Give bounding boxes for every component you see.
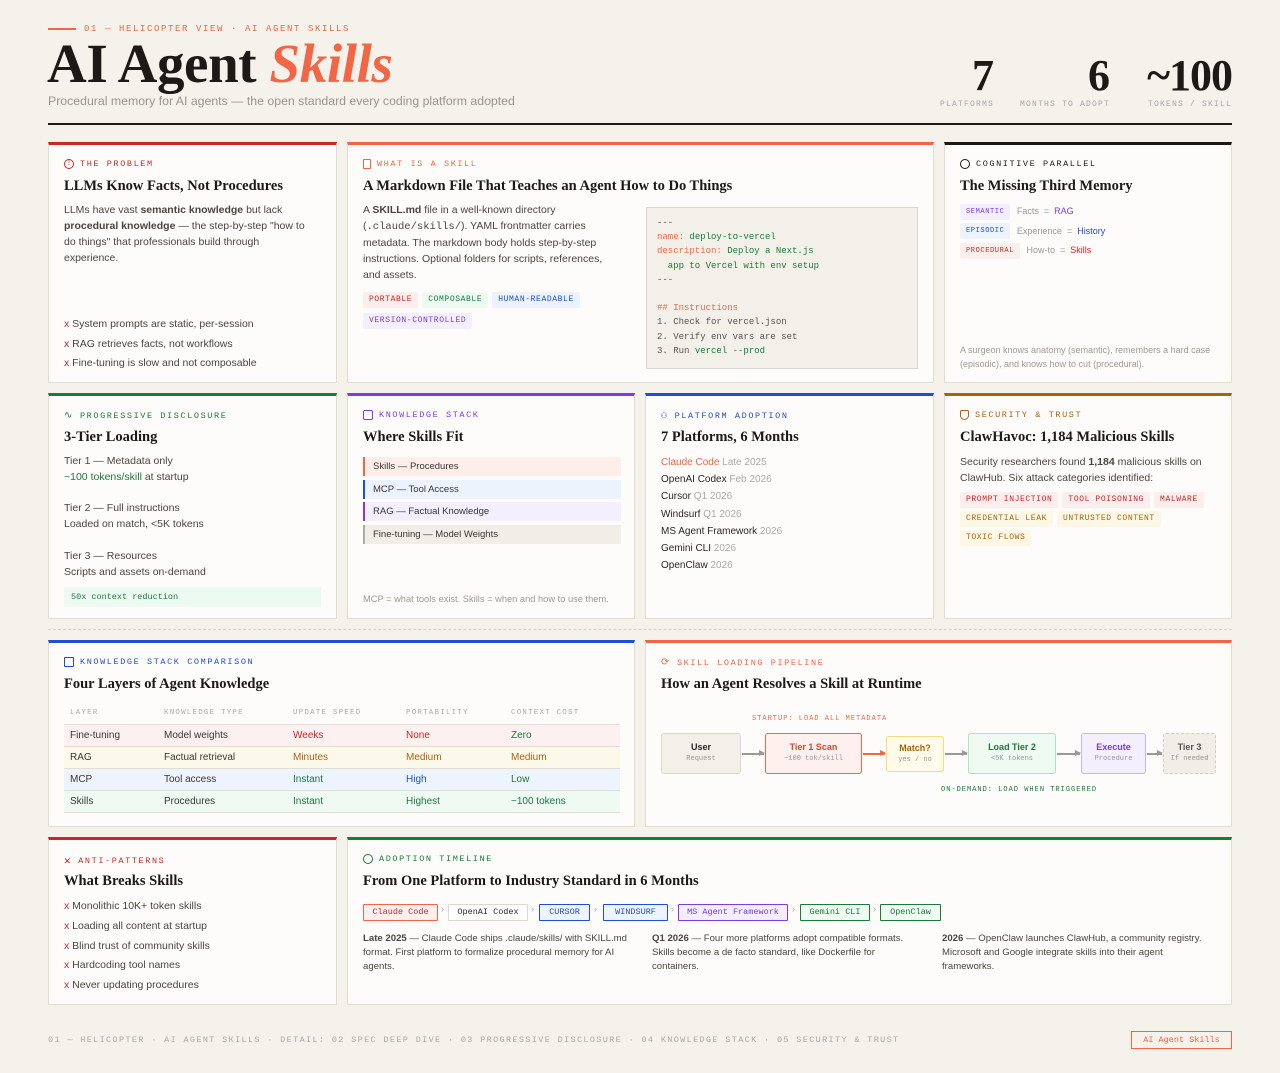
label: ⟳ [661, 658, 671, 669]
stat: months: MONTHS TO ADOPT [1020, 100, 1110, 109]
table: Zero [511, 730, 532, 740]
platform list [661, 457, 782, 571]
tiers: Tier 3 — Resources [64, 550, 157, 562]
text: Gemini CLI [809, 907, 860, 917]
header kicker: 01 — HELICOPTER VIEW · AI AGENT SKILLS [84, 24, 350, 34]
box: execute [1081, 733, 1146, 774]
table: ~100 tokens [511, 796, 566, 806]
box: tier1: Tier 1 Scan [790, 742, 837, 752]
label: ADOPTION TIMELINE [379, 854, 493, 864]
tags [960, 492, 1204, 546]
memory rows: Facts = RAG [1017, 206, 1074, 216]
label: THE PROBLEM [80, 159, 154, 169]
timeline chips [363, 904, 941, 921]
code block: --- name: deploy-to-vercel description: Deploy a Next.js app to Vercel with env setup --- ## Instructions 1. Check for vercel.json 2. Verify env vars are set 3. Run vercel --prod [657, 218, 819, 356]
memory rows: Experience = History [1017, 226, 1105, 236]
panel: security [944, 393, 1232, 619]
panel: pipeline [645, 640, 1232, 827]
stat: platforms: PLATFORMS [940, 100, 994, 109]
platform list: OpenAI Codex Feb 2026 [661, 474, 772, 485]
heading: Four Layers of Agent Knowledge [64, 676, 269, 692]
table: Model weights [164, 730, 228, 740]
text: › [441, 904, 444, 914]
table: PORTABILITY [406, 709, 469, 717]
bullets [64, 318, 257, 369]
heading: 3-Tier Loading [64, 429, 157, 445]
body: A SKILL.md file in a well-known directory (.claude/skills/). YAML frontmatter carries metadata. The markdown body holds step-by-step instructions. Optional folders for scripts, references, and assets. [363, 204, 602, 281]
timeline text: 2026 — OpenClaw launches ClawHub, a community registry. Microsoft and Google integrate skills into their agent frameworks. [942, 933, 1202, 972]
body: LLMs have vast semantic knowledge but lack procedural knowledge — the step-by-step "how to do things" that professionals build through experience. [64, 204, 305, 264]
table: CONTEXT COST [511, 709, 579, 717]
box: load tier 2: Load Tier 2 [988, 742, 1036, 752]
tiers: Tier 1 — Metadata only [64, 455, 173, 467]
panel: what is a skill [347, 142, 934, 383]
stack rows: Fine-tuning — Model Weights [373, 529, 498, 540]
label: SECURITY & TRUST [975, 410, 1082, 420]
tags: TOXIC FLOWS [966, 533, 1025, 542]
panel: knowledge stack [347, 393, 635, 619]
table: LAYER [70, 709, 99, 717]
memory rows: PROCEDURAL [966, 247, 1014, 255]
startup note: STARTUP: LOAD ALL METADATA [752, 715, 887, 723]
bullets: x Loading all content at startup [64, 920, 207, 932]
bullets: x Blind trust of community skills [64, 940, 210, 952]
tags: HUMAN-READABLE [498, 295, 574, 304]
panel: anti-patterns [48, 837, 337, 1005]
footer badge [1131, 1031, 1232, 1049]
callout [64, 587, 321, 607]
memory rows: EPISODIC [966, 227, 1004, 235]
table: Minutes [293, 752, 328, 762]
label: COGNITIVE PARALLEL [976, 159, 1097, 169]
text: OpenAI Codex [457, 907, 519, 917]
heading: From One Platform to Industry Standard in 6 Months [363, 873, 699, 889]
pipeline diagram [661, 715, 1216, 794]
label: ⚇ [661, 411, 669, 422]
label: KNOWLEDGE STACK [379, 410, 480, 420]
body: Security researchers found 1,184 malicious skills on ClawHub. Six attack categories identified: [960, 456, 1202, 484]
table: Instant [293, 796, 323, 806]
table: Weeks [293, 730, 323, 740]
table: Factual retrieval [164, 752, 235, 762]
bullets: x Fine-tuning is slow and not composable [64, 357, 257, 369]
table: Procedures [164, 796, 215, 806]
tags: MALWARE [1160, 495, 1198, 504]
panel: progressive disclosure [48, 393, 337, 619]
box: match: Match? [899, 743, 931, 753]
tiers: Scripts and assets on-demand [64, 566, 206, 578]
stack rows: Skills — Procedures [373, 461, 459, 472]
subtitle: Procedural memory for AI agents — the open standard every coding platform adopted [48, 94, 515, 108]
box: load tier 2 [968, 733, 1056, 774]
stat: tokens: ~100 [1147, 51, 1232, 100]
box: tier 3 [1163, 733, 1216, 774]
label: ✕ [64, 856, 72, 868]
stack rows: RAG — Factual Knowledge [373, 506, 489, 517]
table: UPDATE SPEED [293, 709, 361, 717]
box: match: yes / no [898, 756, 932, 764]
text: › [671, 904, 674, 914]
panel: cognitive parallel [944, 142, 1232, 383]
panel: knowledge stack comparison [48, 640, 635, 827]
label: SKILL LOADING PIPELINE [677, 658, 824, 668]
memory rows [960, 204, 1106, 259]
text: Claude Code [372, 907, 429, 917]
table: KNOWLEDGE TYPE [164, 709, 244, 717]
tiers [64, 455, 206, 578]
tags: TOOL POISONING [1068, 495, 1144, 504]
stat: months: 6 [1088, 51, 1110, 100]
heading: What Breaks Skills [64, 873, 183, 889]
table [64, 709, 620, 813]
box: user: User [691, 742, 711, 752]
label: PROGRESSIVE DISCLOSURE [80, 411, 227, 421]
heading: LLMs Know Facts, Not Procedures [64, 178, 283, 194]
table: High [406, 774, 427, 784]
panel: platform adoption [645, 393, 934, 619]
platform list: Cursor Q1 2026 [661, 491, 732, 502]
stack rows [363, 457, 621, 544]
stats [940, 51, 1232, 109]
bullets: x Hardcoding tool names [64, 959, 180, 971]
box: tier 3: Tier 3 [1178, 742, 1201, 752]
text: OpenClaw [890, 907, 931, 917]
box: load tier 2: <5K tokens [991, 755, 1033, 763]
bullets [64, 900, 210, 991]
heading: The Missing Third Memory [960, 178, 1133, 194]
footer: 01 — HELICOPTER · AI AGENT SKILLS · DETAIL: 02 SPEC DEEP DIVE · 03 PROGRESSIVE DISCLOSURE · 04 KNOWLEDGE STACK · 05 SECURITY & TRUST [48, 1035, 900, 1045]
platform list: Claude Code Late 2025 [661, 457, 767, 468]
table: MCP [70, 774, 92, 784]
callout: 50x context reduction [71, 592, 178, 602]
table: Highest [406, 796, 440, 806]
code block [646, 207, 918, 369]
stat: months [1020, 51, 1110, 109]
stat: platforms: 7 [972, 51, 994, 100]
table: None [406, 730, 430, 740]
bullets: x Monolithic 10K+ token skills [64, 900, 201, 912]
bullets: x Never updating procedures [64, 979, 199, 991]
platform list: Windsurf Q1 2026 [661, 509, 742, 520]
table: Medium [406, 752, 442, 762]
text: WINDSURF [615, 907, 656, 917]
label: ∿ [64, 411, 74, 422]
table: RAG [70, 752, 92, 762]
box: execute: Execute [1096, 742, 1131, 752]
stat: tokens: TOKENS / SKILL [1148, 100, 1232, 109]
table: Tool access [164, 774, 216, 784]
text: MS Agent Framework [687, 907, 779, 917]
text: › [531, 904, 534, 914]
label: ANTI-PATTERNS [78, 856, 165, 866]
platform list: MS Agent Framework 2026 [661, 526, 782, 537]
text: › [792, 904, 795, 914]
label: WHAT IS A SKILL [377, 159, 478, 169]
table: Fine-tuning [70, 730, 120, 740]
memory rows: SEMANTIC [966, 208, 1004, 216]
tags: PORTABLE [369, 295, 412, 304]
box: match [886, 736, 944, 772]
platform list: OpenClaw 2026 [661, 560, 733, 571]
heading: ClawHavoc: 1,184 Malicious Skills [960, 429, 1174, 445]
label: PLATFORM ADOPTION [675, 411, 789, 421]
heading: A Markdown File That Teaches an Agent How to Do Things [363, 178, 732, 194]
memory rows: How-to = Skills [1027, 245, 1091, 255]
text: › [873, 904, 876, 914]
tiers: Loaded on match, <5K tokens [64, 518, 204, 530]
platform list: Gemini CLI 2026 [661, 543, 736, 554]
tiers: ~100 tokens/skill at startup [64, 470, 189, 482]
tags: CREDENTIAL LEAK [966, 514, 1047, 523]
table: Medium [511, 752, 547, 762]
bullets: x RAG retrieves facts, not workflows [64, 338, 233, 350]
title: AI Agent Skills [47, 33, 392, 94]
heading: Where Skills Fit [363, 429, 463, 445]
bullets: x System prompts are static, per-session [64, 318, 254, 330]
stack rows: MCP — Tool Access [373, 484, 459, 495]
tags: UNTRUSTED CONTENT [1063, 514, 1155, 523]
table: Skills [70, 796, 93, 806]
panel: the problem [48, 142, 337, 383]
box: tier1: ~100 tok/skill [784, 755, 843, 763]
box: user [661, 733, 741, 774]
text: CURSOR [549, 907, 580, 917]
footnote: A surgeon knows anatomy (semantic), remembers a hard case (episodic), and knows how to cut (procedural). [960, 345, 1210, 369]
table: Instant [293, 774, 323, 784]
on-demand note: ON-DEMAND: LOAD WHEN TRIGGERED [941, 786, 1097, 794]
timeline text: Late 2025 — Claude Code ships .claude/skills/ with SKILL.md format. First platform to formalize procedural memory for AI agents. [363, 933, 627, 972]
heading: How an Agent Resolves a Skill at Runtime [661, 676, 922, 692]
tags [363, 292, 580, 329]
timeline text [363, 933, 1202, 972]
tags: COMPOSABLE [428, 295, 482, 304]
table: Low [511, 774, 529, 784]
panel: adoption timeline [347, 837, 1232, 1005]
text: › [594, 904, 597, 914]
box: tier1 [765, 733, 862, 774]
label: ! [67, 160, 71, 168]
heading: 7 Platforms, 6 Months [661, 429, 799, 445]
footnote: MCP = what tools exist. Skills = when and how to use them. [363, 594, 609, 604]
label: KNOWLEDGE STACK COMPARISON [80, 657, 254, 667]
tags: VERSION-CONTROLLED [369, 316, 466, 325]
box: user: Request [686, 755, 716, 763]
box: tier 3: If needed [1171, 755, 1208, 763]
tiers: Tier 2 — Full instructions [64, 502, 180, 514]
stat: platforms [940, 51, 994, 109]
tags: PROMPT INJECTION [966, 495, 1052, 504]
footer badge: AI Agent Skills [1143, 1035, 1220, 1045]
timeline text: Q1 2026 — Four more platforms adopt compatible formats. Skills become a de facto standard, like Dockerfile for containers. [652, 933, 903, 972]
box: execute: Procedure [1095, 755, 1132, 763]
